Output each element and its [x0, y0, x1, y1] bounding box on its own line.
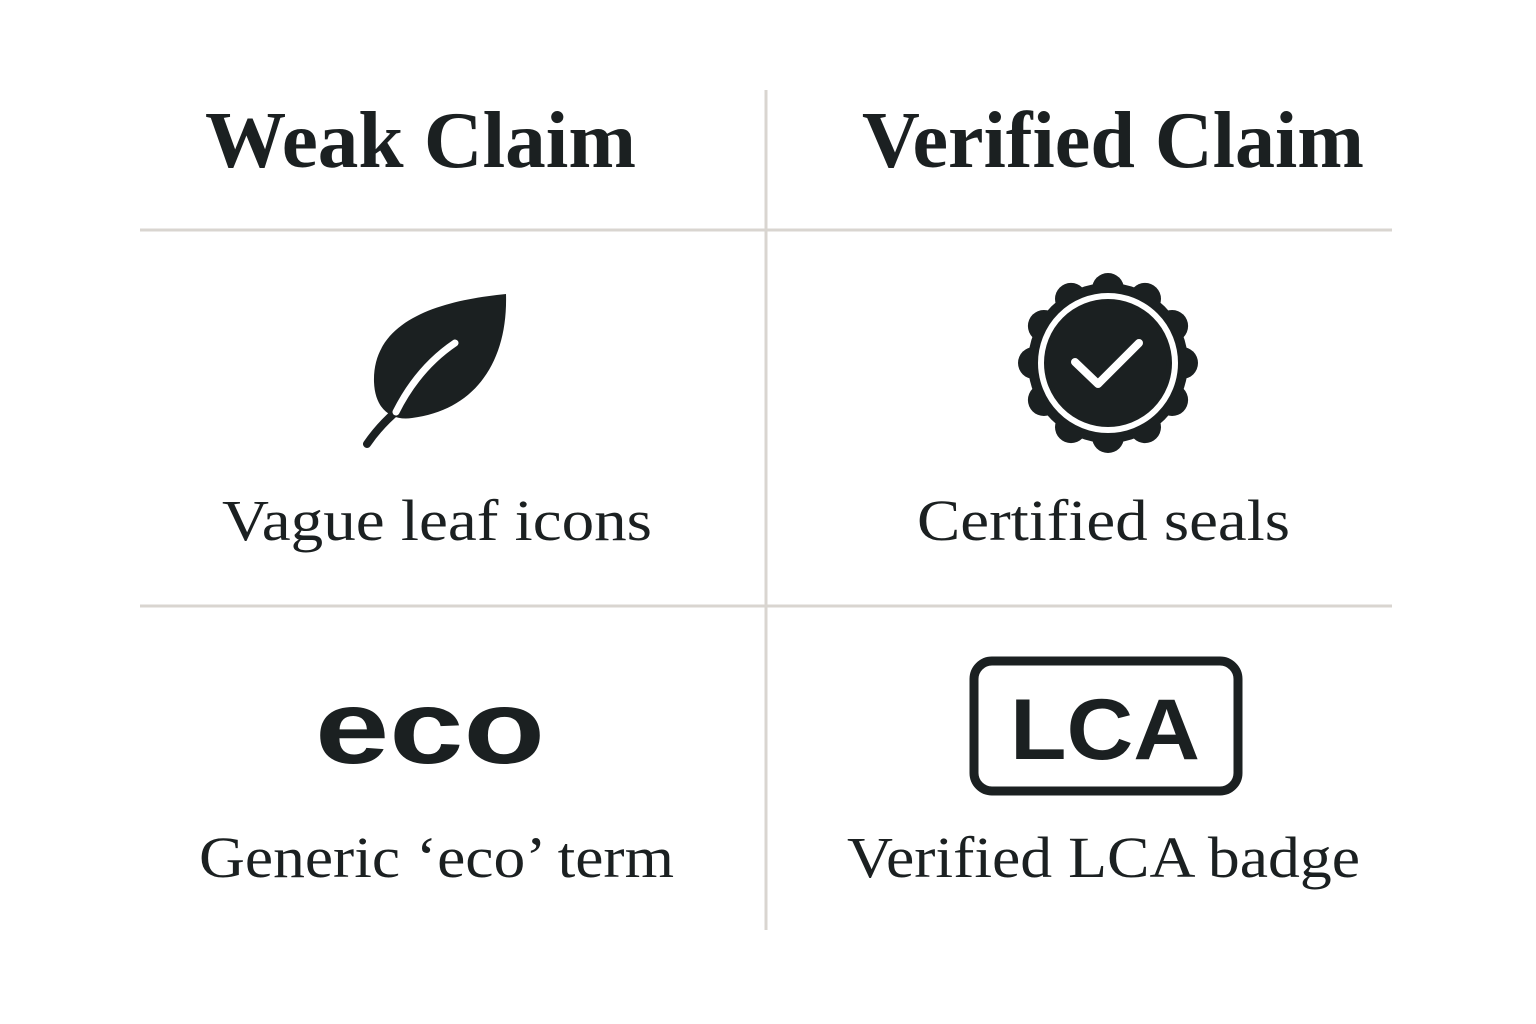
icon: certified seal [1018, 273, 1198, 453]
icon: LCA badge: LCA [1010, 682, 1200, 778]
label: Certified seals: Certified seals [917, 488, 1290, 553]
label: Verified LCA badge: Verified LCA badge [847, 825, 1360, 890]
title: Weak Claim: Weak Claim [205, 97, 636, 185]
label: Vague leaf icons: Vague leaf icons [222, 488, 652, 553]
icon: eco word: eco [315, 670, 545, 786]
title: Verified Claim: Verified Claim [862, 97, 1364, 185]
label: Generic eco term: Generic ‘eco’ term [199, 825, 674, 890]
icon: leaf [367, 294, 506, 444]
icon: LCA badge [974, 661, 1238, 791]
